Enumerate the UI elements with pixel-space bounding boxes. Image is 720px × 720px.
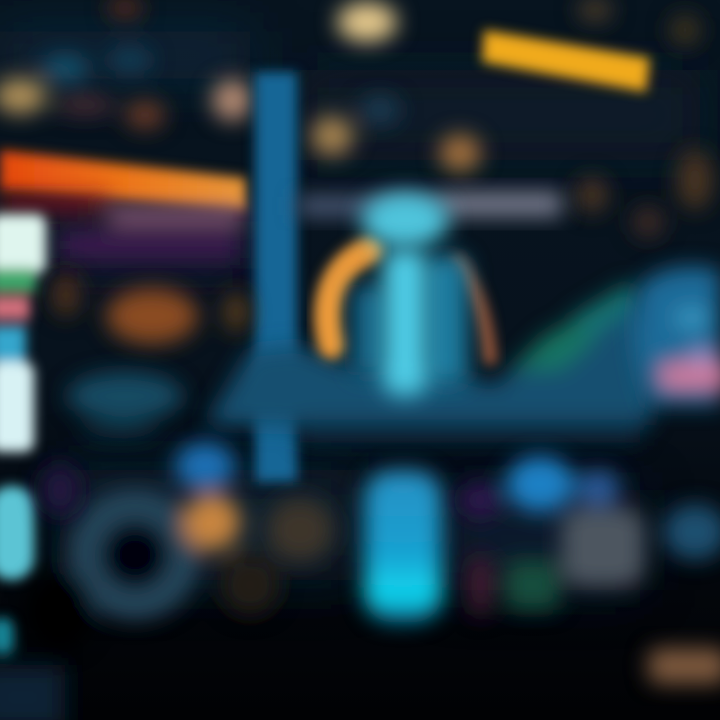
lower-right cluster <box>40 456 720 617</box>
left edge bars <box>0 214 65 720</box>
brown arc <box>458 262 490 358</box>
brown left blob <box>52 273 248 344</box>
cyan peak <box>352 192 468 396</box>
orange arc <box>328 250 370 345</box>
background glow <box>0 30 700 590</box>
vertical blue bar <box>255 72 297 482</box>
cyan top blob <box>361 192 449 248</box>
bright cyan column <box>364 470 442 622</box>
top scattered lights <box>0 0 713 238</box>
lower-left gauge <box>26 442 334 650</box>
bottom-right tan bar <box>648 648 720 684</box>
cyan column shade <box>424 255 468 385</box>
yellow-orange bar <box>482 30 650 92</box>
teal left shade <box>352 285 386 375</box>
cyan column <box>382 248 428 396</box>
orange horizontal bar <box>0 150 246 210</box>
teal mid-left blob <box>67 372 183 438</box>
right blue panel <box>634 266 720 405</box>
teal mountain chart <box>205 282 660 442</box>
grey horizontal band <box>298 192 562 216</box>
pink and purple bands <box>0 196 245 258</box>
